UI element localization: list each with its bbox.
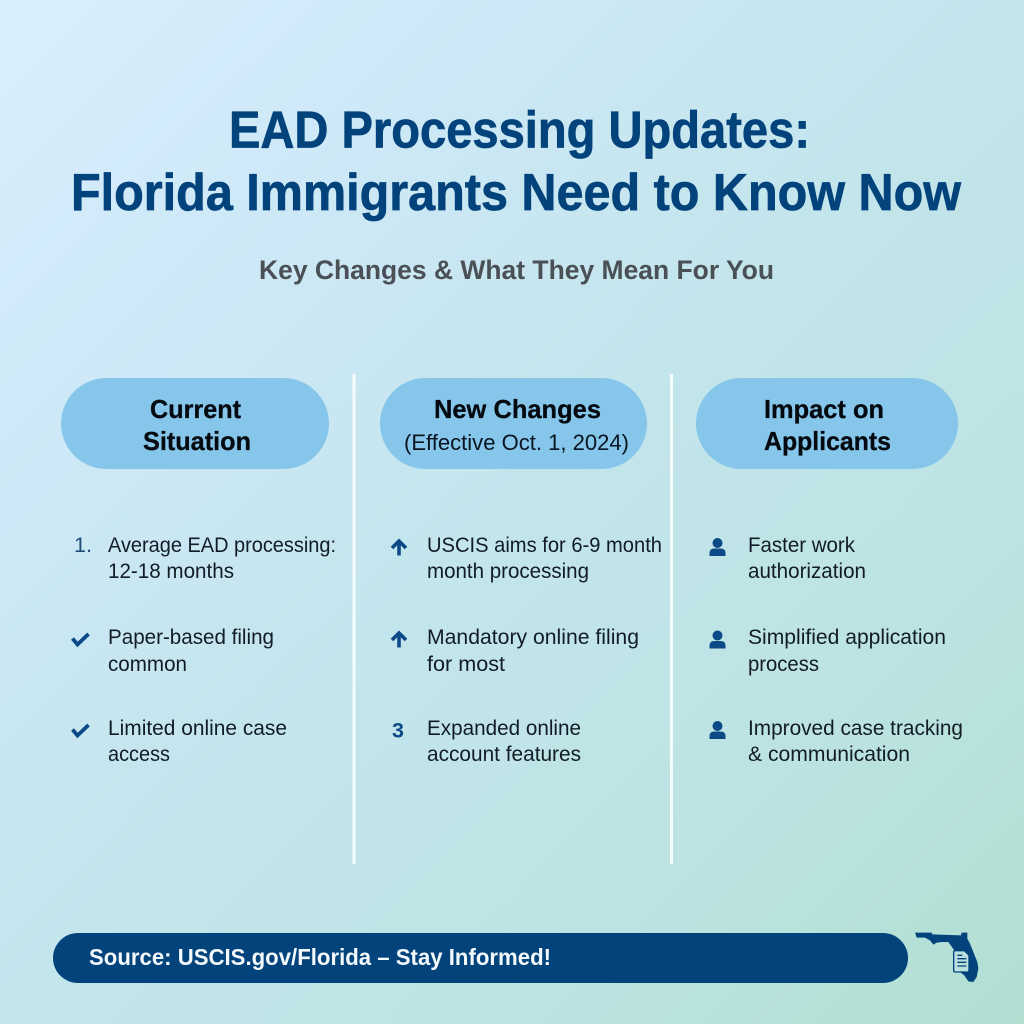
column dividers [352, 374, 673, 864]
item: expanded account features: account features [427, 742, 581, 766]
item: processing target: month processing [427, 559, 589, 583]
title: Florida Immigrants Need to Know Now [71, 163, 962, 221]
heading pill: impact on applicants: Applicants [764, 426, 891, 456]
item: faster authorization [710, 533, 866, 583]
item: paper-based filing: Paper-based filing [108, 625, 274, 649]
heading pill: new changes: New Changes [434, 394, 601, 424]
item: mandatory online filing [392, 625, 639, 676]
item: expanded account features: Expanded online [427, 716, 581, 740]
item: average processing: 12-18 months [108, 559, 234, 583]
item: simplified process [710, 625, 946, 676]
item: expanded account features: 3 [392, 718, 404, 742]
item: faster authorization: authorization [748, 559, 866, 583]
heading pill: new changes [380, 378, 647, 469]
item: mandatory online filing: for most [427, 652, 505, 676]
subtitle: Key Changes & What They Mean For You [259, 255, 774, 285]
item: simplified process: Simplified application [748, 625, 946, 649]
source bar: Source: USCIS.gov/Florida – Stay Informed! [89, 944, 551, 970]
item: paper-based filing [72, 625, 274, 676]
item: faster authorization: Faster work [748, 533, 855, 557]
item: limited online access [72, 716, 287, 766]
item: limited online access: Limited online case [108, 716, 287, 740]
item: processing target: USCIS aims for 6-9 month [427, 533, 662, 557]
title: EAD Processing Updates: [229, 100, 810, 158]
item: average processing [74, 533, 336, 583]
item: improved tracking: & communication [748, 742, 910, 766]
icon: Florida map with document [915, 933, 978, 982]
item: improved tracking: Improved case tracking [748, 716, 963, 740]
heading pill: impact on applicants: Impact on [764, 394, 884, 424]
item: simplified process: process [748, 652, 819, 676]
heading pill: current situation [61, 378, 329, 469]
item: processing target [392, 533, 662, 583]
item: expanded account features [392, 716, 581, 766]
heading pill: current situation: Situation [143, 426, 251, 456]
heading pill: new changes: (Effective Oct. 1, 2024) [404, 430, 629, 455]
item: paper-based filing: common [108, 652, 187, 676]
item: improved tracking [710, 716, 963, 766]
item: limited online access: access [108, 742, 170, 766]
heading pill: impact on applicants [696, 378, 958, 469]
panel: new changes [380, 378, 662, 766]
source bar [53, 933, 908, 983]
heading pill: current situation: Current [150, 394, 241, 424]
panel: current situation [61, 378, 336, 766]
item: mandatory online filing: Mandatory online filing [427, 625, 639, 649]
title [71, 100, 962, 221]
item: average processing: Average EAD processing: [108, 533, 336, 557]
panel: impact on applicants [696, 378, 963, 766]
item: average processing: 1. [74, 534, 92, 557]
